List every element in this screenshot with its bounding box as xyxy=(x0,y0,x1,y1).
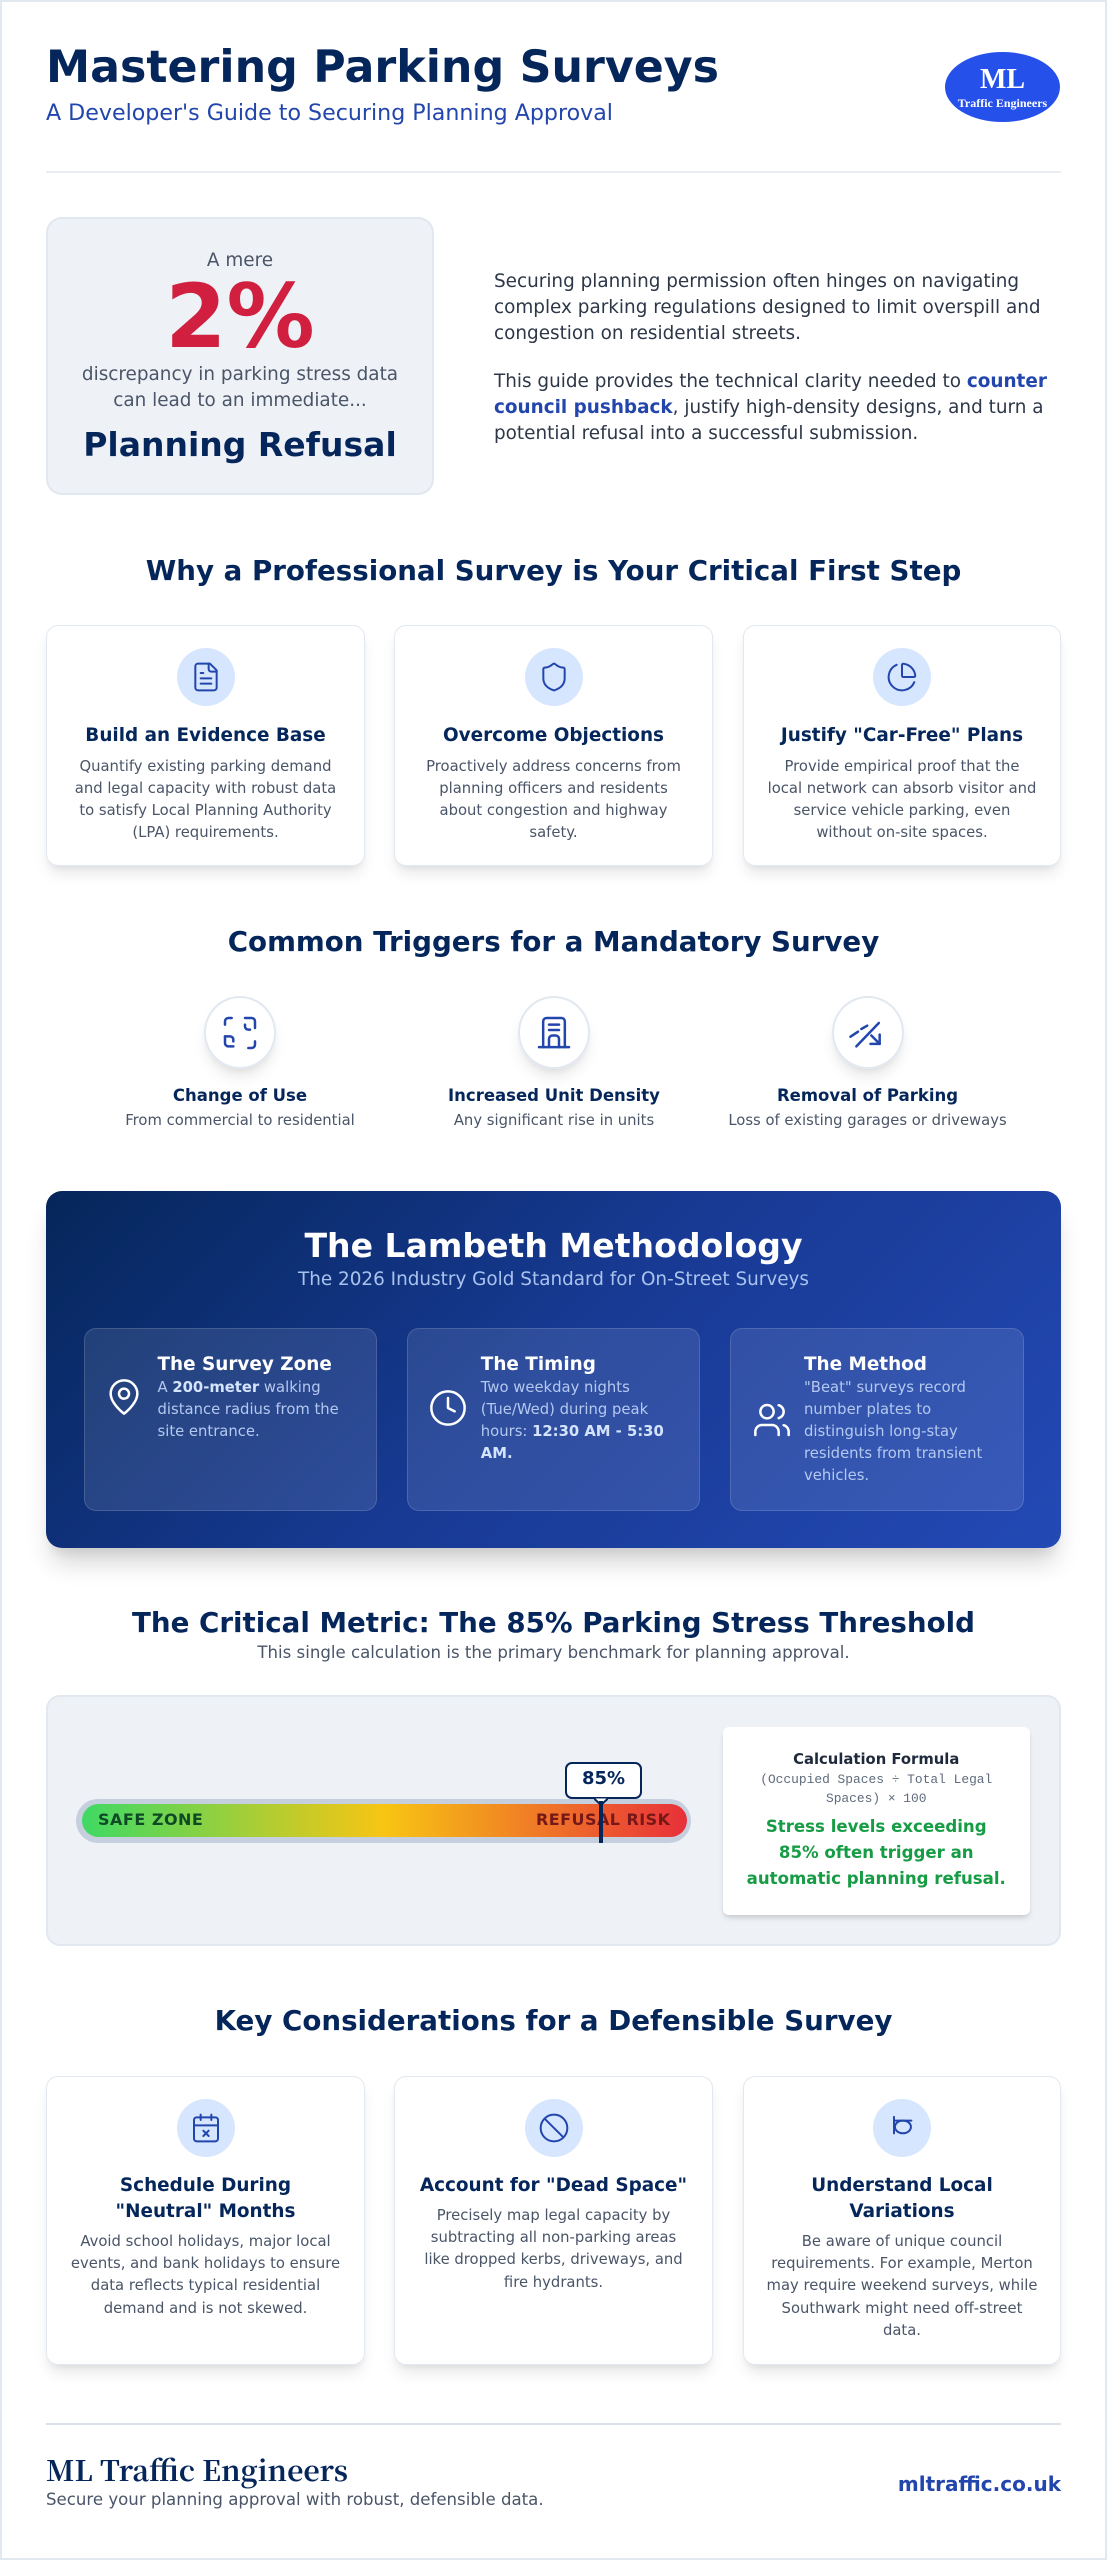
card text: local network can absorb visitor and xyxy=(768,780,1036,797)
card text xyxy=(768,758,1036,841)
step: timing xyxy=(407,1328,700,1511)
trigger heading: Change of Use xyxy=(173,1086,307,1105)
card text: about congestion and highway xyxy=(440,802,667,819)
card text xyxy=(424,2207,683,2291)
icon: scan xyxy=(204,996,276,1069)
heading: common triggers: Common Triggers for a Mandatory Survey xyxy=(228,925,879,958)
icon: map pin xyxy=(109,1379,139,1415)
trigger heading: Increased Unit Density xyxy=(448,1086,660,1105)
trigger heading: Removal of Parking xyxy=(777,1086,958,1105)
intro text: congestion on residential streets. xyxy=(494,323,801,344)
card text xyxy=(75,758,336,841)
card text: Avoid school holidays, major local xyxy=(80,2233,331,2250)
card text: (LPA) requirements. xyxy=(132,824,279,841)
metric subheading: This single calculation is the primary benchmark for planning approval. xyxy=(257,1643,850,1662)
step text xyxy=(480,1379,664,1462)
panel: Lambeth methodology xyxy=(46,1191,1061,1548)
step heading: The Method xyxy=(804,1354,927,1375)
card text: Quantify existing parking demand xyxy=(79,758,332,775)
step text: residents from transient xyxy=(804,1445,982,1462)
card text: Proactively address concerns from xyxy=(426,758,681,775)
card heading xyxy=(116,2175,295,2222)
panel: 2% statistic xyxy=(46,217,434,495)
heading: critical metric: The Critical Metric: The 85% Parking Stress Threshold xyxy=(132,1606,975,1639)
step text: "Beat" surveys record xyxy=(804,1379,966,1396)
step text: number plates to xyxy=(804,1401,931,1418)
stat description: discrepancy in parking stress data xyxy=(82,364,398,385)
card text: subtracting all non-parking areas xyxy=(431,2229,676,2246)
trigger text: Any significant rise in units xyxy=(454,1112,654,1129)
icon: people xyxy=(754,1404,790,1436)
intro text: potential refusal into a successful submission. xyxy=(494,423,918,444)
intro text: council pushback, justify high-density designs, and turn a xyxy=(494,397,1044,418)
stat number: 2% xyxy=(165,265,315,368)
panel: parking stress threshold xyxy=(46,1695,1061,1946)
logo xyxy=(945,52,1060,122)
card heading: "Neutral" Months xyxy=(116,2201,295,2222)
step text xyxy=(804,1379,982,1484)
footer brand: ML Traffic Engineers xyxy=(46,2448,348,2490)
card heading: Schedule During xyxy=(120,2175,291,2196)
card: car-free plans xyxy=(743,625,1061,866)
intro text: complex parking regulations designed to limit overspill and xyxy=(494,297,1041,318)
card text: Provide empirical proof that the xyxy=(784,758,1019,775)
card heading: Justify "Car-Free" Plans xyxy=(781,724,1023,746)
card heading: Build an Evidence Base xyxy=(85,724,326,746)
intro text: This guide provides the technical clarity needed to counter xyxy=(494,371,1047,392)
footer link: mltraffic.co.uk xyxy=(898,2472,1061,2496)
card: neutral months xyxy=(46,2076,365,2365)
card text: to satisfy Local Planning Authority xyxy=(79,802,332,819)
step: survey zone xyxy=(84,1328,377,1511)
formula note xyxy=(747,1817,1006,1888)
safe zone label: SAFE ZONE xyxy=(98,1810,203,1828)
formula note: 85% often trigger an xyxy=(779,1843,974,1862)
step text: distance radius from the xyxy=(158,1401,339,1418)
card text: like dropped kerbs, driveways, and xyxy=(424,2251,683,2268)
icon: building xyxy=(518,996,590,1069)
card text: Be aware of unique council xyxy=(802,2233,1002,2250)
heading: key considerations: Key Considerations for a Defensible Survey xyxy=(215,2004,892,2037)
card text: Southwark might need off-street xyxy=(782,2300,1022,2317)
gauge track xyxy=(76,1799,691,1843)
stat intro: A mere xyxy=(207,250,273,271)
icon: ban xyxy=(524,2099,582,2157)
card text: data reflects typical residential xyxy=(91,2277,320,2294)
heading: why a professional survey: Why a Professional Survey is Your Critical First Step xyxy=(146,554,961,587)
gauge: stress bar xyxy=(76,1762,691,1843)
logo: ML xyxy=(980,64,1025,95)
card: dead space xyxy=(394,2076,713,2365)
formula note: Stress levels exceeding xyxy=(766,1817,987,1836)
step heading: The Survey Zone xyxy=(158,1354,332,1375)
card text xyxy=(767,2233,1037,2339)
subtitle: A Developer's Guide to Securing Planning Approval xyxy=(46,100,613,126)
icon: calendar xyxy=(176,2099,234,2157)
icon: local glyph xyxy=(872,2099,930,2157)
card text: requirements. For example, Merton xyxy=(771,2255,1033,2272)
step text: hours: 12:30 AM - 5:30 xyxy=(481,1423,664,1440)
callout: calculation formula xyxy=(722,1727,1030,1915)
card text xyxy=(426,758,681,841)
formula: Spaces) × 100 xyxy=(826,1791,927,1806)
card text: safety. xyxy=(529,824,578,841)
trigger: unit density xyxy=(448,996,660,1129)
card: local variations xyxy=(743,2076,1061,2365)
icon: clock xyxy=(430,1390,466,1426)
step text xyxy=(158,1379,339,1440)
card text: planning officers and residents xyxy=(439,780,668,797)
card heading: Account for "Dead Space" xyxy=(420,2175,687,2196)
card text xyxy=(71,2233,340,2317)
card heading: Understand Local xyxy=(811,2175,993,2196)
card text: may require weekend surveys, while xyxy=(767,2277,1037,2294)
trigger: removal of parking xyxy=(728,996,1007,1129)
step text: AM. xyxy=(481,1445,513,1462)
card heading: Overcome Objections xyxy=(443,724,664,746)
card text: without on-site spaces. xyxy=(816,824,988,841)
stat description xyxy=(82,364,398,411)
icon: pie chart xyxy=(872,648,930,706)
step text: A 200-meter walking xyxy=(158,1379,321,1396)
trigger text: Loss of existing garages or driveways xyxy=(728,1112,1007,1129)
stat description: can lead to an immediate... xyxy=(113,390,367,411)
step: method xyxy=(730,1328,1024,1511)
intro text xyxy=(494,271,1047,444)
icon: shield xyxy=(524,648,582,706)
formula xyxy=(760,1772,992,1806)
panel subheading: The 2026 Industry Gold Standard for On-Street Surveys xyxy=(298,1269,809,1290)
card text: data. xyxy=(883,2322,921,2339)
formula note: automatic planning refusal. xyxy=(747,1869,1006,1888)
card heading: Variations xyxy=(849,2201,955,2222)
refusal risk label: REFUSAL RISK xyxy=(536,1810,670,1828)
step heading: The Timing xyxy=(481,1354,596,1375)
stat outcome: Planning Refusal xyxy=(83,425,397,464)
panel heading: The Lambeth Methodology xyxy=(304,1226,803,1265)
trigger text: From commercial to residential xyxy=(125,1112,355,1129)
step text: vehicles. xyxy=(804,1467,869,1484)
card text: events, and bank holidays to ensure xyxy=(71,2255,340,2272)
card text: fire hydrants. xyxy=(504,2274,603,2291)
formula heading: Calculation Formula xyxy=(793,1750,959,1768)
marker label xyxy=(565,1762,642,1799)
logo: Traffic Engineers xyxy=(958,96,1047,110)
trigger: change of use xyxy=(125,996,355,1129)
title: Mastering Parking Surveys xyxy=(46,42,719,93)
step text: Two weekday nights xyxy=(481,1379,630,1396)
icon: document xyxy=(176,648,234,706)
card: overcome objections xyxy=(394,625,713,866)
step text: (Tue/Wed) during peak xyxy=(481,1401,648,1418)
card text: demand and is not skewed. xyxy=(104,2300,307,2317)
step text: site entrance. xyxy=(158,1423,260,1440)
footer tagline: Secure your planning approval with robust, defensible data. xyxy=(46,2490,544,2509)
card heading xyxy=(811,2175,993,2222)
intro text: Securing planning permission often hinges on navigating xyxy=(494,271,1019,292)
card: evidence base xyxy=(46,625,365,866)
icon: slashed arrow xyxy=(832,996,904,1069)
formula: (Occupied Spaces ÷ Total Legal xyxy=(760,1772,992,1787)
step text: distinguish long-stay xyxy=(804,1423,958,1440)
card text: service vehicle parking, even xyxy=(794,802,1010,819)
card text: and legal capacity with robust data xyxy=(75,780,336,797)
marker label: 85% xyxy=(582,1768,625,1789)
card text: Precisely map legal capacity by xyxy=(437,2207,670,2224)
